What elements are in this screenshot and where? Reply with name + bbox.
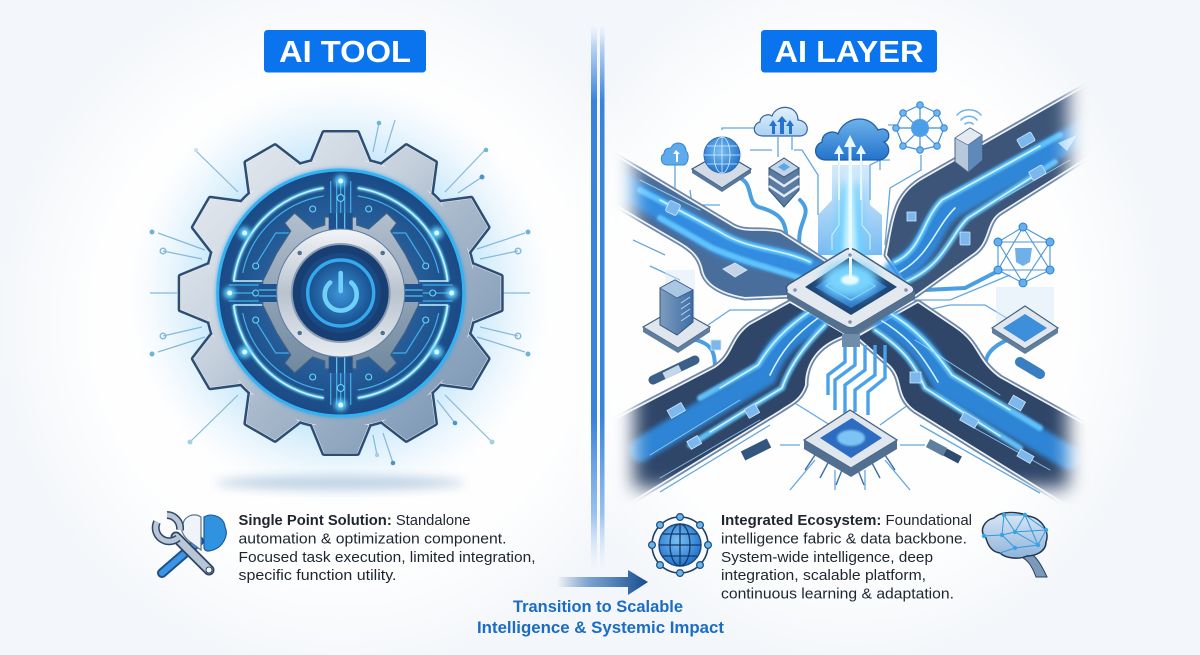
text block: single point solution: automation & optimization component. <box>238 530 506 548</box>
server tower top right <box>955 128 982 172</box>
icon: wrench and brain <box>156 515 226 573</box>
icon: connected globe <box>649 514 711 576</box>
heading: AI LAYER <box>761 30 937 72</box>
text block: single point solution: specific function utility. <box>238 567 396 584</box>
connectors <box>653 360 1040 460</box>
illustration: AI layer network <box>605 84 1090 505</box>
transition arrow <box>557 570 648 595</box>
server tower left <box>643 270 710 353</box>
text block: integrated ecosystem <box>721 512 972 602</box>
glowing nodes <box>224 175 458 411</box>
wifi signal <box>957 110 981 124</box>
road surfaces <box>605 84 1090 505</box>
heading: AI TOOL: AI TOOL <box>279 34 411 69</box>
radiating data lines <box>150 120 530 465</box>
database stack <box>769 158 799 207</box>
light streams <box>610 128 1090 478</box>
globe platform <box>692 137 751 192</box>
cloud: small upload <box>754 107 807 136</box>
inner cog <box>259 213 423 373</box>
wrench <box>156 515 212 573</box>
data roads with streams, faded at outer edges <box>605 84 1090 505</box>
text block: single point solution: Single Point Solution: Standalone <box>238 512 470 529</box>
text block: integrated ecosystem: continuous learning & adaptation. <box>721 586 954 602</box>
transition caption: Intelligence & Systemic Impact <box>477 619 725 637</box>
thin connectors <box>633 125 1040 493</box>
gear body <box>178 130 503 456</box>
chip right <box>992 287 1058 354</box>
heading: AI TOOL <box>264 30 426 72</box>
text block: integrated ecosystem: intelligence fabric & data backbone. <box>721 530 967 548</box>
neural net: right with face <box>994 223 1054 287</box>
central chip <box>786 160 915 347</box>
heading: AI LAYER: AI LAYER <box>774 34 924 69</box>
small chips on roads <box>665 132 1046 463</box>
chip bottom <box>804 410 897 485</box>
center divider <box>591 25 604 570</box>
central beam <box>818 160 882 260</box>
bottom stem cables <box>828 345 885 415</box>
text block: single point solution <box>238 512 536 584</box>
gear icon with power button <box>178 130 503 456</box>
text block: integrated ecosystem: Integrated Ecosystem: Foundational <box>721 512 972 529</box>
circuit ring <box>217 169 465 417</box>
neural net: top <box>893 102 947 153</box>
gear shadow <box>215 476 465 490</box>
transition caption: Transition to Scalable <box>513 598 683 616</box>
icon: neural brain <box>982 512 1048 577</box>
transition caption <box>477 598 725 637</box>
screwdriver <box>162 541 199 573</box>
brain halves <box>204 515 226 551</box>
thick tube connectors <box>696 178 1007 375</box>
power button <box>277 229 405 357</box>
cloud: left <box>661 143 688 165</box>
text block: integrated ecosystem: System-wide intelligence, deep <box>721 549 933 566</box>
text block: single point solution: Focused task execution, limited integration, <box>238 549 536 566</box>
cloud: large <box>816 119 889 250</box>
text block: integrated ecosystem: integration, scalable platform, <box>721 567 926 584</box>
glow behind gear <box>126 78 556 508</box>
